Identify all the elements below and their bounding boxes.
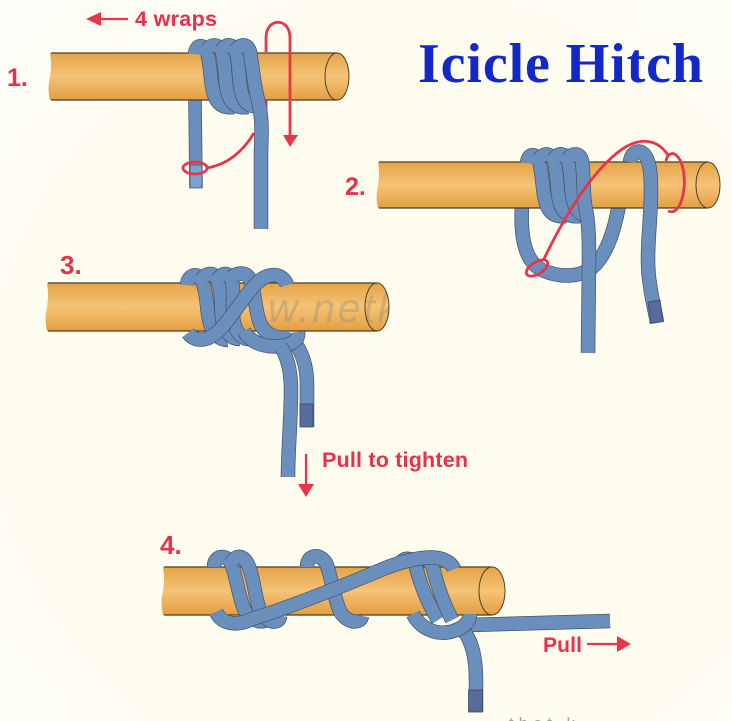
- step 1 wraps arrow and label: [86, 7, 217, 31]
- step 1 red path: [183, 22, 298, 174]
- step 3 pull label and arrow: [298, 448, 468, 497]
- step 3 pull label and arrow: Pull to tighten: [322, 448, 468, 472]
- step 3 diagram: [46, 250, 468, 497]
- step 4 pole: [162, 567, 505, 615]
- step 4 pull label and arrow: [543, 634, 631, 657]
- step 2 diagram: [345, 141, 720, 353]
- step 1 pole: [48, 53, 349, 100]
- title: Icicle Hitch: [418, 33, 703, 95]
- step 3 pole: [46, 283, 400, 331]
- step 4 number: 4.: [160, 530, 182, 560]
- step 4 diagram: [160, 530, 631, 712]
- step 1 number: 1.: [7, 64, 28, 92]
- step 2 lower loop behind pole: [522, 205, 619, 275]
- step 2 wraps and working end: [527, 151, 663, 353]
- step 1 wraps: [195, 45, 262, 229]
- step 2 red path: [524, 141, 684, 279]
- step 4 rope: [214, 556, 610, 712]
- step 1 wraps arrow and label: 4 wraps: [135, 7, 217, 31]
- step 4 pull label and arrow: Pull: [543, 634, 582, 657]
- watermark: w.netk: [268, 285, 400, 331]
- step 1 diagram: [7, 7, 349, 229]
- step 3 number: 3.: [60, 250, 82, 280]
- step 3 wraps and tails: [187, 273, 313, 477]
- step 2 pole: [376, 162, 720, 208]
- step 2 number: 2.: [345, 173, 366, 201]
- step 1 standing end: [190, 98, 202, 188]
